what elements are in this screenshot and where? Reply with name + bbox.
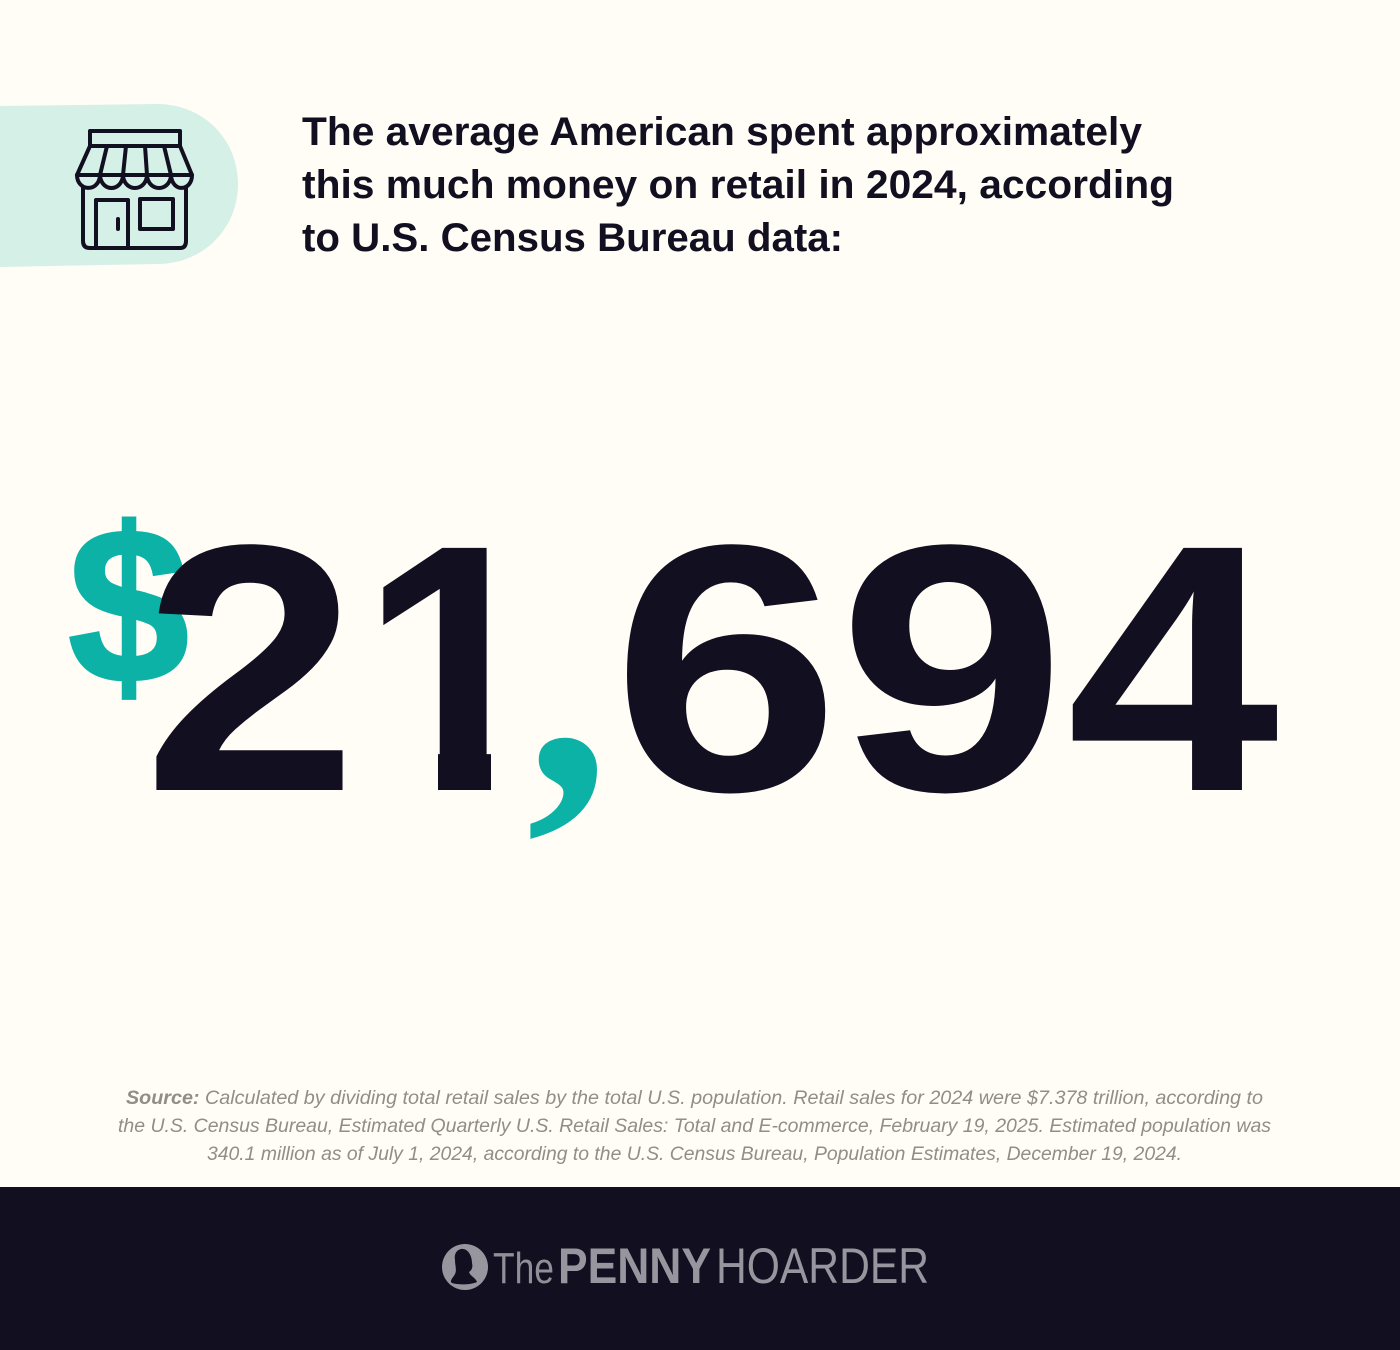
heading: to U.S. Census Bureau data:: [302, 216, 843, 260]
big number: $21,694: 4: [1067, 471, 1281, 865]
dollar sign: $: [68, 482, 189, 729]
logo: The Penny Hoarder: [442, 1238, 929, 1294]
heading: The average American spent approximately: [302, 110, 1143, 154]
big number: $21,694: 1: [360, 471, 550, 865]
footer band: [0, 1187, 1400, 1350]
icon panel: mint tab with storefront: [0, 104, 238, 267]
logo: The Penny Hoarder: The: [493, 1244, 554, 1293]
logo: The Penny Hoarder: HOARDER: [716, 1238, 929, 1294]
heading: this much money on retail in 2024, according: [302, 163, 1174, 207]
source note: 340.1 million as of July 1, 2024, according to the U.S. Census Bureau, Population Estimates, December 19, 2024.: [207, 1144, 1182, 1165]
comma: ,: [526, 489, 610, 860]
source note: [118, 1088, 1272, 1165]
source note: Source: Calculated by dividing total retail sales by the total U.S. population. Retail sales for 2024 were $7.378 trillion, according to: [126, 1088, 1263, 1109]
big number: $21,694: [69, 516, 1277, 839]
icon: storefront: [77, 131, 192, 248]
heading: [302, 110, 1174, 260]
source note: the U.S. Census Bureau, Estimated Quarterly U.S. Retail Sales: Total and E-commerce, February 19, 2025. Estimated population was: [118, 1116, 1272, 1137]
icon: penny silhouette: [442, 1244, 488, 1290]
big number: $21,694: 9: [838, 471, 1066, 865]
logo: The Penny Hoarder: PENNY: [558, 1238, 711, 1294]
big number: $21,694: 2: [143, 471, 358, 865]
big number: $21,694: 6: [612, 471, 840, 865]
